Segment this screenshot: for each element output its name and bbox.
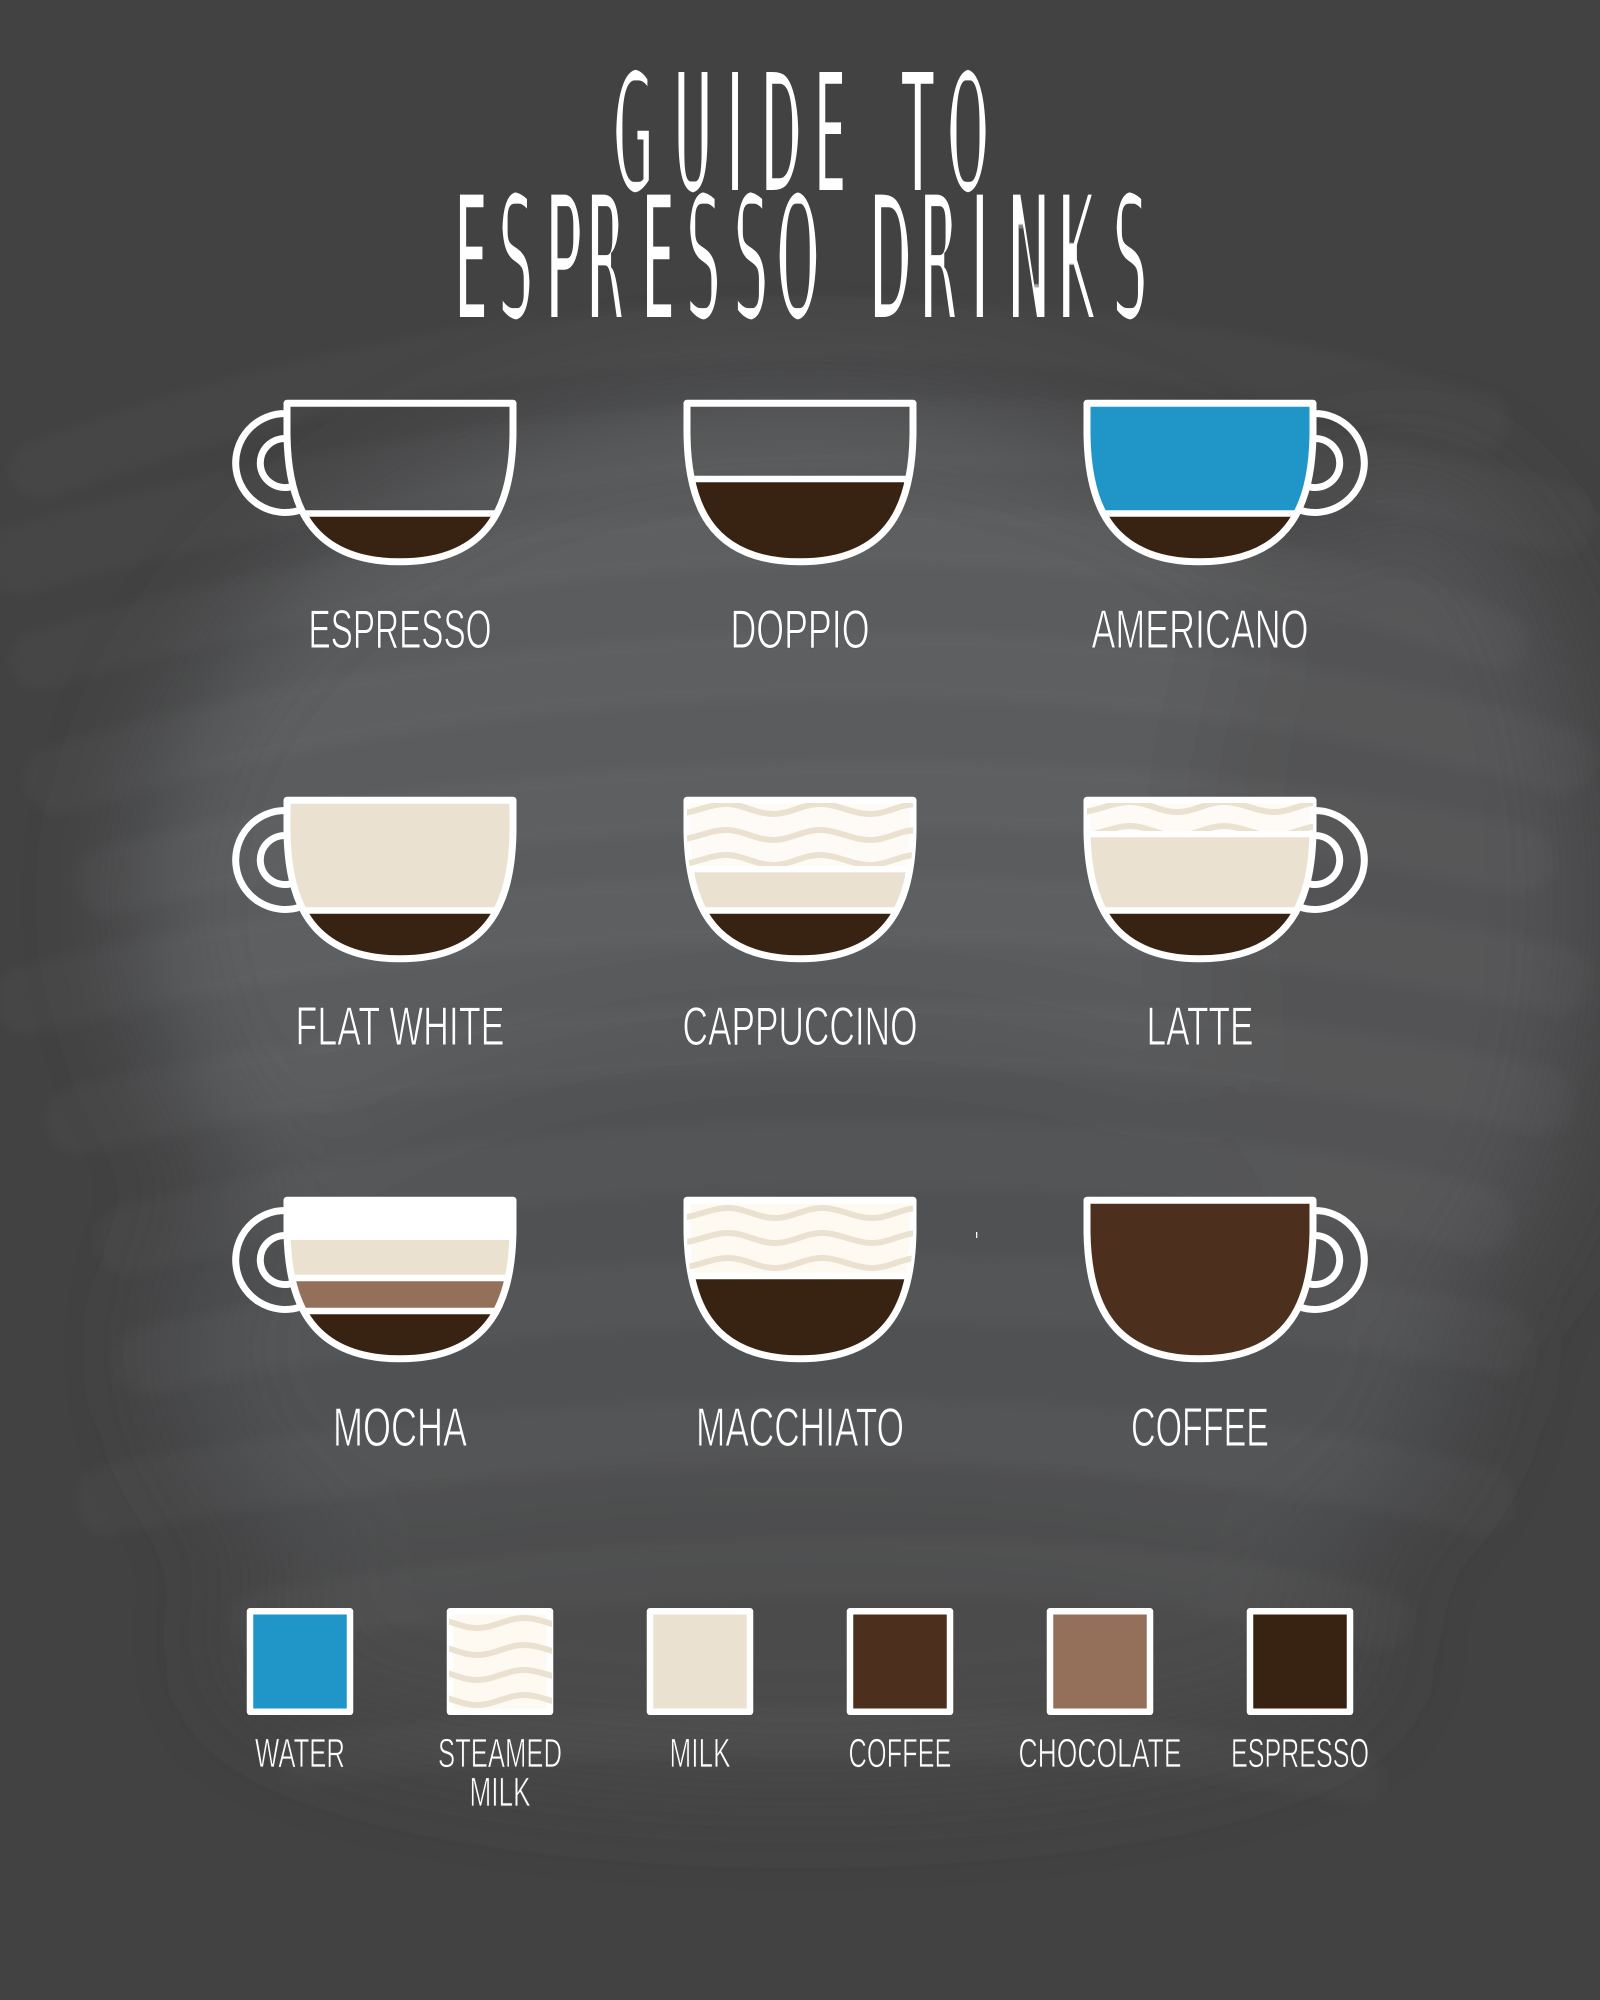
cup: latte	[1079, 800, 1364, 963]
swatch: steamed milk	[446, 1608, 554, 1715]
legend label: water: WATER	[255, 1730, 345, 1776]
label: espresso: ESPRESSO	[308, 598, 492, 660]
label: doppio: DOPPIO	[730, 598, 870, 660]
swatch: espresso	[1250, 1611, 1350, 1712]
legend label: steamed milk: STEAMED	[438, 1730, 562, 1776]
title	[453, 30, 1150, 369]
legend label: coffee: COFFEE	[848, 1730, 952, 1776]
label: americano: AMERICANO	[1092, 598, 1308, 660]
cup: mocha	[236, 1197, 513, 1364]
swatch: water	[250, 1611, 350, 1712]
label: cappuccino: CAPPUCCINO	[682, 995, 918, 1057]
legend label: chocolate: CHOCOLATE	[1018, 1730, 1182, 1776]
legend label: espresso: ESPRESSO	[1231, 1730, 1369, 1776]
swatch: coffee	[850, 1611, 950, 1712]
cup: americano	[1087, 403, 1364, 566]
stray mark	[976, 1232, 977, 1238]
cup: espresso	[236, 403, 513, 566]
swatch: chocolate	[1050, 1611, 1150, 1712]
label: mocha: MOCHA	[333, 1396, 467, 1458]
cup: doppio	[687, 403, 913, 566]
cup: coffee	[1087, 1200, 1364, 1363]
cup: flat white	[236, 800, 513, 963]
swatch: milk	[650, 1611, 750, 1712]
label: flat white: FLAT WHITE	[296, 995, 504, 1057]
label: coffee: COFFEE	[1131, 1396, 1269, 1458]
title: ESPRESSO DRINKS	[453, 152, 1150, 369]
legend label: milk: MILK	[670, 1730, 730, 1776]
cup: macchiato	[677, 1200, 919, 1363]
label: latte: LATTE	[1146, 995, 1254, 1057]
legend	[250, 1611, 1369, 1815]
legend label: steamed milk line 2: MILK	[470, 1769, 530, 1815]
cup: cappuccino	[675, 800, 917, 963]
title: GUIDE TO	[612, 30, 990, 240]
label: macchiato: MACCHIATO	[696, 1396, 904, 1458]
